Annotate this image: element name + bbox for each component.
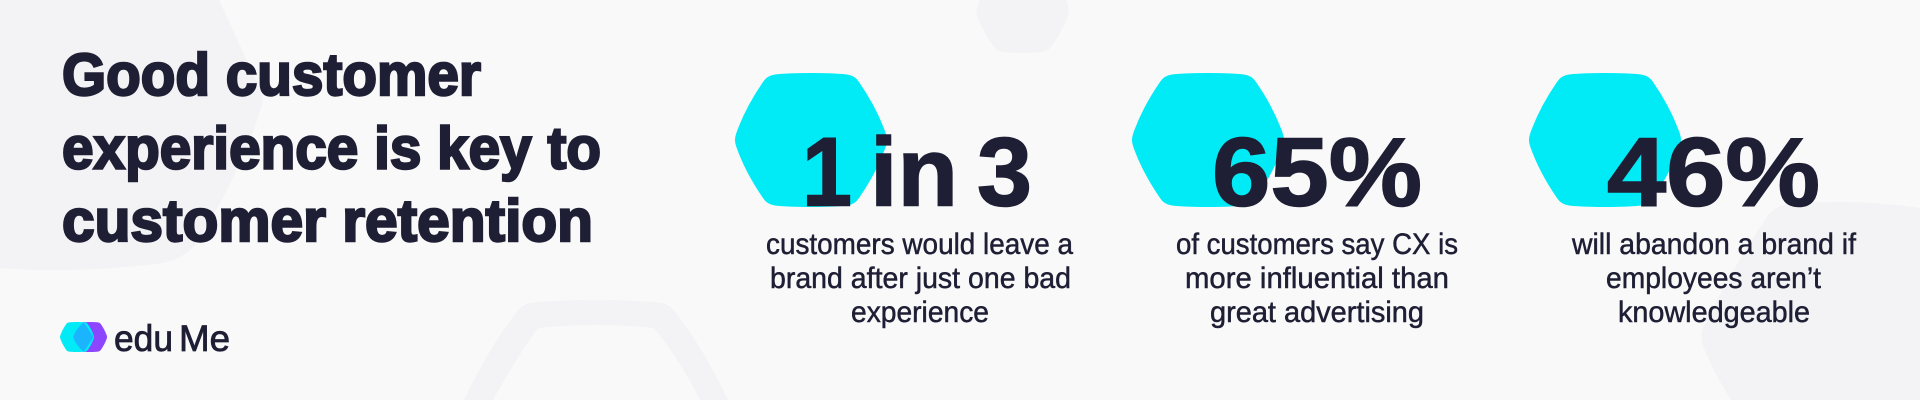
number: 1 (802, 118, 852, 226)
description: experience (851, 296, 989, 329)
description: brand after just one bad (770, 262, 1071, 295)
description: employees aren’t (1606, 262, 1822, 295)
description: customers would leave a (766, 228, 1073, 261)
icon: logo hexagons (60, 322, 107, 352)
background hexagon outline: bottom centre (464, 300, 728, 400)
number: 65% (1212, 118, 1422, 226)
logo wordmark: edu (114, 318, 173, 359)
description: more influential than (1185, 262, 1449, 295)
number: 3 (977, 118, 1032, 226)
description (766, 228, 1073, 329)
number: in (870, 118, 958, 226)
icon: cyan hexagon (735, 73, 887, 207)
description: knowledgeable (1618, 296, 1810, 329)
background hexagon: top centre (976, 0, 1069, 53)
description (1176, 228, 1458, 329)
background hexagon: top left (0, 0, 262, 270)
stat: 1 in 3 (735, 73, 1073, 329)
description: great advertising (1210, 296, 1424, 329)
description: of customers say CX is (1176, 228, 1458, 261)
icon: cyan hexagon (1132, 73, 1284, 207)
stat: 65% (1132, 73, 1458, 329)
description (1571, 228, 1857, 329)
logo: eduMe (60, 318, 230, 359)
title: experience is key to (62, 116, 601, 182)
title (62, 42, 601, 254)
number: 46% (1607, 118, 1820, 226)
icon: cyan hexagon (1529, 73, 1681, 207)
title: Good customer (62, 42, 481, 108)
logo wordmark: Me (179, 318, 230, 359)
background hexagon: bottom right (1702, 202, 1920, 400)
description: will abandon a brand if (1571, 228, 1857, 261)
title: customer retention (62, 188, 593, 254)
stat: 46% (1529, 73, 1857, 329)
